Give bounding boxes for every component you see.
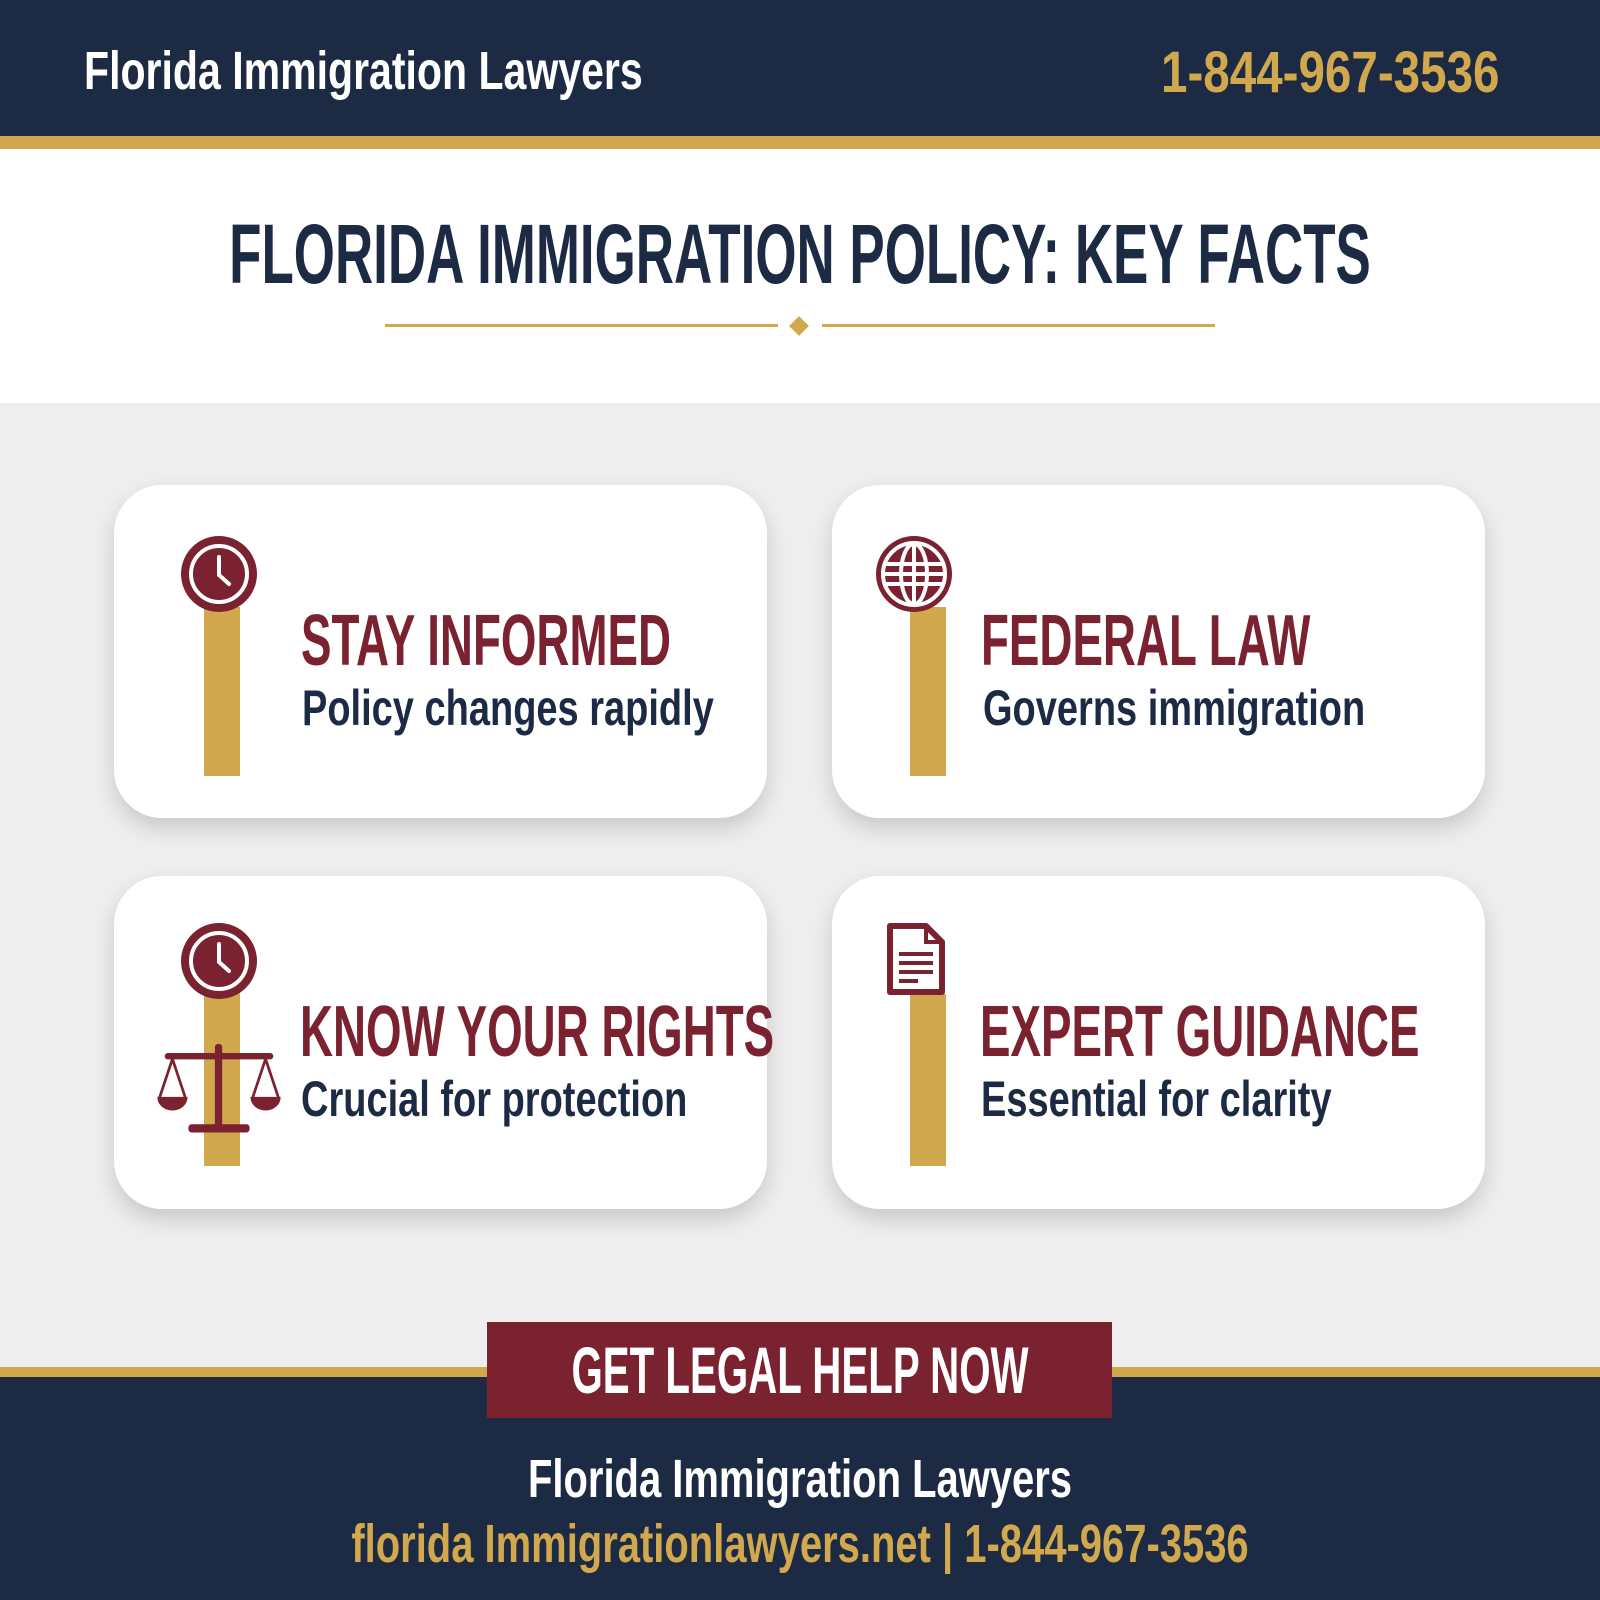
title band — [0, 149, 1600, 403]
heading: EXPERT GUIDANCE — [980, 992, 1419, 1072]
card: stay informed — [114, 485, 767, 818]
header phone: 1-844-967-3536 — [1161, 40, 1499, 105]
title: FLORIDA IMMIGRATION POLICY: KEY FACTS — [229, 207, 1371, 301]
icon: clock — [181, 536, 257, 612]
card: expert guidance — [832, 876, 1485, 1209]
gold bar — [910, 994, 946, 1166]
gold bar — [910, 607, 946, 776]
icon: scales — [157, 1044, 281, 1132]
CTA button: GET LEGAL HELP NOW — [571, 1333, 1028, 1407]
footer — [0, 1367, 1600, 1600]
icon: globe — [876, 536, 952, 612]
card: federal law — [832, 485, 1485, 818]
subtext: Crucial for protection — [301, 1071, 687, 1127]
title divider — [385, 316, 1215, 336]
header bar — [0, 0, 1600, 149]
footer brand: Florida Immigration Lawyers — [528, 1449, 1072, 1509]
heading: FEDERAL LAW — [981, 601, 1310, 681]
subtext: Policy changes rapidly — [302, 680, 714, 736]
card: know your rights — [114, 876, 767, 1209]
gold bar — [204, 986, 240, 1166]
header brand: Florida Immigration Lawyers — [84, 41, 643, 101]
icon: document — [887, 923, 945, 995]
icon: clock — [181, 923, 257, 999]
gold bar — [204, 607, 240, 776]
CTA button — [487, 1322, 1112, 1418]
subtext: Essential for clarity — [981, 1071, 1332, 1127]
heading: STAY INFORMED — [301, 601, 671, 681]
footer contact: florida Immigrationlawyers.net | 1-844-967-3536 — [351, 1514, 1249, 1574]
heading: KNOW YOUR RIGHTS — [300, 992, 774, 1072]
subtext: Governs immigration — [983, 680, 1365, 736]
